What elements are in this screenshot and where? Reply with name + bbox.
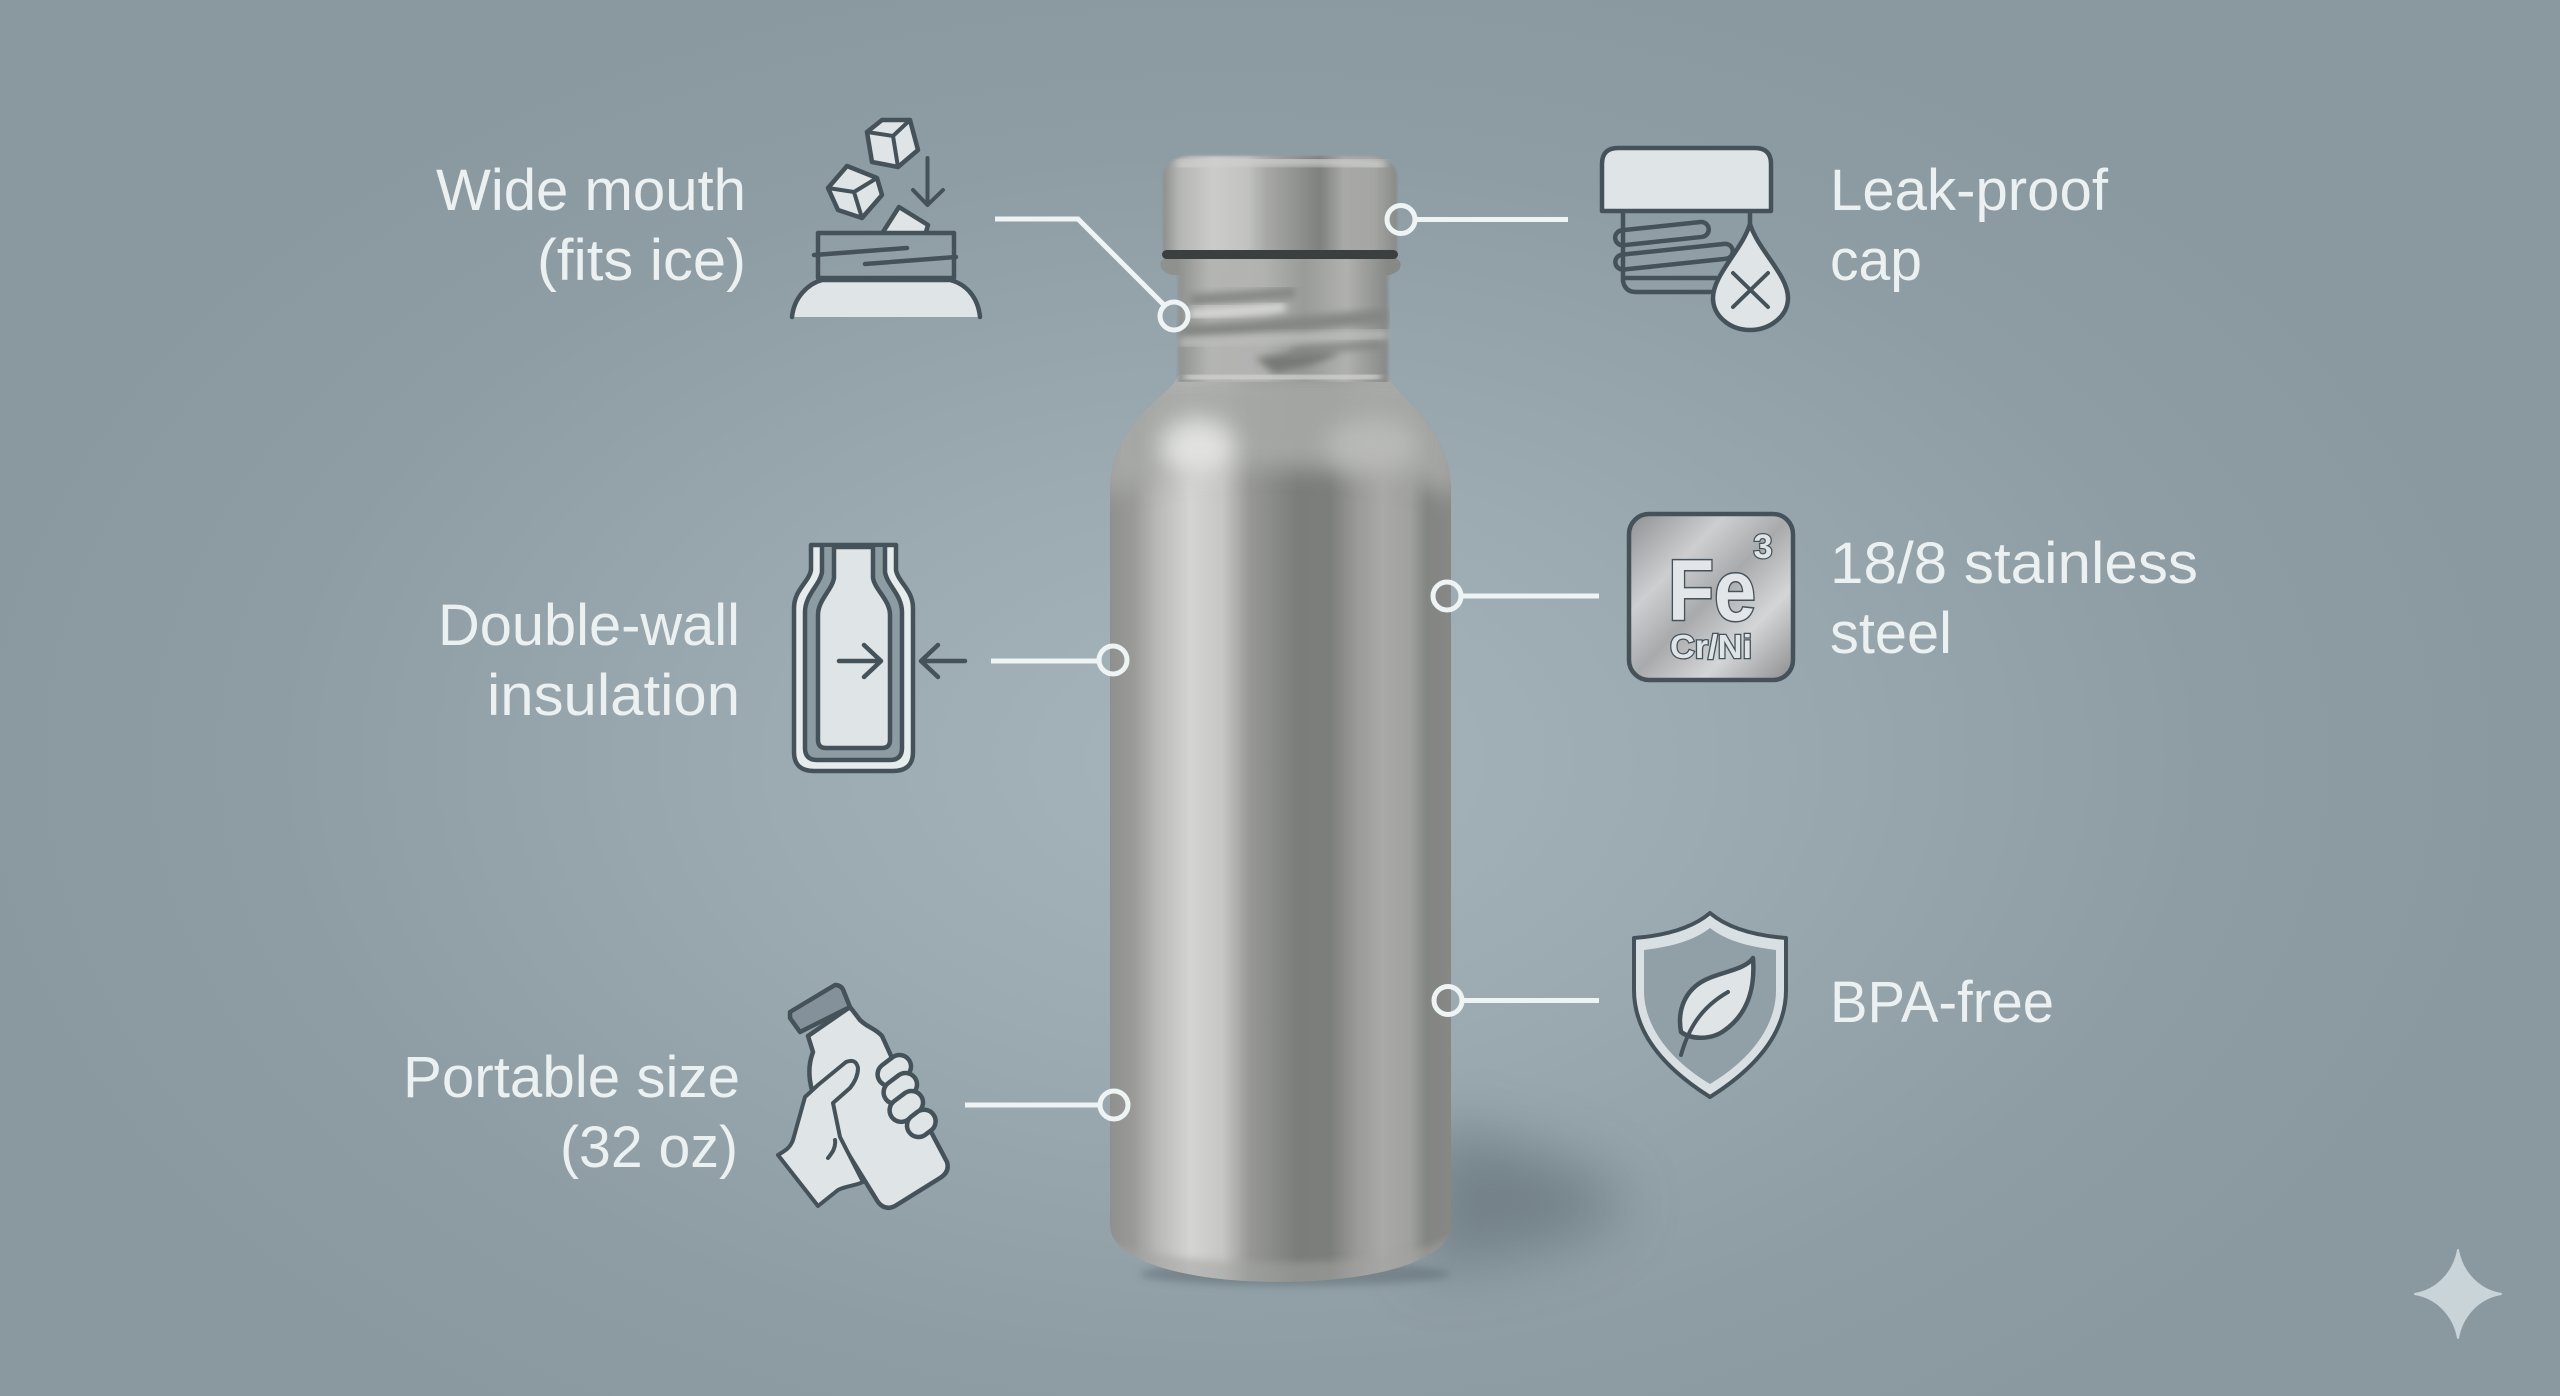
label: leak-proof cap: cap — [1830, 228, 1922, 293]
icon: Fe element tile: Cr/Ni — [1670, 628, 1752, 665]
label: double-wall insulation: insulation — [487, 663, 740, 728]
screw cap — [1163, 156, 1397, 252]
callout: double-wall insulation — [438, 545, 1127, 771]
icon: double-wall section — [794, 545, 965, 771]
icon: Fe element tile: 3 — [1754, 528, 1772, 566]
callout: leak-proof cap — [1387, 148, 2109, 330]
leader: stainless steel — [1433, 582, 1599, 610]
label: leak-proof cap: Leak-proof — [1830, 158, 2109, 223]
lip highlight — [1175, 261, 1390, 269]
icon: ice into wide mouth — [792, 120, 980, 317]
lip underline — [1172, 274, 1390, 278]
callout: portable size — [403, 985, 1128, 1208]
icon: cap with blocked drop — [1602, 148, 1788, 330]
leader: BPA-free — [1434, 986, 1599, 1014]
icon: shield with leaf — [1634, 913, 1786, 1097]
bottle neck — [1176, 275, 1390, 382]
callout: wide mouth — [436, 120, 1188, 330]
label: stainless steel — [1830, 531, 2198, 666]
leader: double-wall insulation — [991, 646, 1127, 674]
label: portable size — [403, 1045, 740, 1180]
label: stainless steel: steel — [1830, 601, 1952, 666]
label: double-wall insulation: Double-wall — [438, 593, 740, 658]
bottle lip — [1160, 258, 1401, 275]
label: wide mouth — [436, 158, 746, 293]
label: wide mouth: (fits ice) — [537, 228, 746, 293]
icon: corner sparkle — [2415, 1250, 2501, 1338]
bottle body — [1100, 370, 1460, 1290]
leader: wide mouth — [995, 219, 1188, 330]
icon: Fe element tile: Fe — [1668, 543, 1756, 639]
label: stainless steel: 18/8 stainless — [1830, 531, 2198, 596]
leader: leak-proof cap — [1387, 206, 1568, 234]
infographic canvas — [404, 118, 2502, 1339]
label: portable size: Portable size — [403, 1045, 740, 1110]
label: wide mouth: Wide mouth — [436, 158, 746, 223]
bottle cast shadow — [1140, 1125, 1625, 1286]
sealing ring — [1162, 250, 1398, 259]
callout: 18/8 stainless steel — [1433, 514, 2198, 680]
icon: Fe element tile — [1629, 514, 1793, 680]
label: leak-proof cap — [1830, 158, 2109, 293]
label: double-wall insulation — [438, 593, 740, 728]
label: BPA-free: BPA-free — [1830, 970, 2054, 1035]
bottle — [1100, 156, 1460, 1290]
icon: hand holding bottle — [778, 985, 948, 1208]
leader: portable size — [965, 1091, 1128, 1119]
callout: BPA-free — [1434, 913, 2054, 1097]
cap rim highlight — [1178, 161, 1385, 165]
label: portable size: (32 oz) — [560, 1115, 738, 1180]
